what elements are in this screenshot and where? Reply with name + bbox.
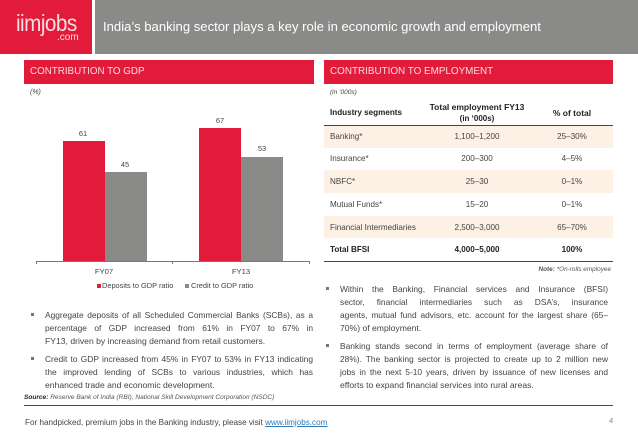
bullet: banking employment: efforts to expand financial services into rural areas. [340, 380, 534, 390]
row: Financial Intermediaries [324, 216, 613, 238]
row: Mutual Funds: 15–20 [466, 200, 488, 209]
row: Banking: 1,100–1,200 [454, 132, 500, 141]
bullet marker [31, 313, 34, 316]
bar: FY07 deposits [63, 141, 105, 261]
panel: contribution to GDP heading [24, 60, 314, 84]
bullet marker [31, 357, 34, 360]
row: Banking [324, 126, 613, 148]
source note: Source: Reserve Bank of India (RBI), National Skill Development Corporation (NSDC) [24, 394, 274, 401]
bullet: banking employment: Banking stands second in terms of employment (average share of [340, 341, 608, 351]
bullet: deposits: Aggregate deposits of all Scheduled Commercial Banks (SCBs), as a [45, 310, 313, 320]
row: Insurance: 200–300 [461, 154, 493, 163]
row: Banking: Banking* [330, 132, 362, 141]
bullet: credit: Credit to GDP increased from 45% in FY07 to 53% in FY13 indicating [45, 354, 313, 364]
bullet: BFSI share: Within the Banking, Financial services and Insurance (BFSI) [340, 284, 608, 294]
row: Banking: 25–30% [557, 132, 587, 141]
footer text: For handpicked, premium jobs in the Banking industry, please visit www.iimjobs.com [25, 418, 327, 427]
right bullets text block [326, 284, 608, 390]
bullet: credit: enhanced trade and economic development. [45, 380, 215, 390]
bullet: BFSI share: sector, financial intermediaries such as DSA’s, insurance [340, 297, 608, 307]
bullet marker [326, 287, 329, 290]
row: Financial Intermediaries: 65–70% [557, 223, 587, 232]
row: Mutual Funds: Mutual Funds* [330, 200, 382, 209]
bullet: deposits [45, 310, 314, 346]
footer rule [24, 405, 613, 406]
table header [330, 102, 591, 122]
row: Insurance [330, 154, 582, 163]
panel: contribution to employment heading: CONTRIBUTION TO EMPLOYMENT [330, 66, 493, 77]
panel: contribution to employment heading [324, 60, 613, 84]
row: NBFC [324, 170, 613, 193]
column header: share: % of total [553, 108, 591, 118]
legend swatch: credit [185, 284, 189, 288]
column header: total employment: Total employment FY13 [430, 102, 524, 112]
row: Financial Intermediaries: 2,500–3,000 [454, 223, 500, 232]
bar: FY13 credit [241, 157, 283, 261]
row: Financial Intermediaries: Financial Intermediaries [330, 223, 416, 232]
legend [97, 281, 253, 290]
left bullets text block [31, 310, 314, 390]
header rule [324, 125, 613, 126]
bullet: banking employment: 28%). The banking sector is projected to create up to 2 million new [340, 354, 608, 364]
legend swatch: deposits [97, 284, 101, 288]
value label 61: 61 [79, 129, 87, 138]
axis label FY13: FY13 [232, 267, 250, 276]
row: Insurance: Insurance* [330, 154, 369, 163]
panel: contribution to GDP heading: CONTRIBUTION TO GDP [30, 66, 144, 77]
row: NBFC: 0–1% [562, 177, 582, 186]
unit label: percent: (%) [30, 89, 41, 96]
row: Mutual Funds: 0–1% [562, 200, 582, 209]
value label 53: 53 [258, 144, 266, 153]
bullet: BFSI share: 70%) of employment. [340, 323, 421, 333]
bullet: deposits: percentage of GDP increased from 61% in FY07 to 67% in [45, 323, 313, 333]
bar: FY07 credit [105, 172, 147, 261]
row: Total BFSI: 4,000–5,000 [454, 245, 500, 254]
table note: Note: *On-rolls employee [539, 266, 611, 273]
bar: FY13 deposits [199, 128, 241, 261]
legend label: deposits: Deposits to GDP ratio [102, 281, 173, 290]
column header: total employment [430, 102, 524, 122]
page number: 4 [609, 416, 613, 425]
bullet: deposits: FY13, driven by increasing demand from retail customers. [45, 336, 265, 346]
column header: segments: Industry segments [330, 108, 402, 117]
bullet: credit: the improved lending of SCBs to various industries, which has [45, 367, 313, 377]
bullet: BFSI share [340, 284, 608, 333]
value label 67: 67 [216, 116, 224, 125]
bullet: BFSI share: agents, mutual fund advisors, etc. account for the largest share (65– [340, 310, 608, 320]
row: Total BFSI: 100% [562, 245, 582, 254]
legend label: credit: Credit to GDP ratio [191, 281, 253, 290]
title bar [95, 0, 638, 54]
bar chart [36, 116, 310, 264]
logo wordmark: iimjobs [16, 10, 77, 36]
unit label: thousands: (in ’000s) [330, 89, 357, 96]
axis label FY07: FY07 [95, 267, 113, 276]
row: Total BFSI: Total BFSI [330, 245, 369, 254]
title: India’s banking sector plays a key role in economic growth and employment [103, 19, 541, 34]
value label 45: 45 [121, 160, 129, 169]
row: Mutual Funds [330, 200, 582, 209]
row: NBFC: 25–30 [466, 177, 488, 186]
employment table [324, 102, 613, 262]
logo block [0, 0, 92, 54]
table bottom rule [324, 261, 613, 262]
bullet: banking employment: jobs in the next 5-10 years, driven by issuance of new licenses and [340, 367, 608, 377]
bullet: credit [45, 354, 313, 390]
row: NBFC: NBFC* [330, 177, 355, 186]
bullet: banking employment [340, 341, 608, 390]
row: Insurance: 4–5% [562, 154, 582, 163]
axis line [36, 261, 310, 262]
column header: total employment: (in ‘000s) [460, 114, 494, 122]
row: Total BFSI [330, 245, 582, 254]
bullet marker [326, 344, 329, 347]
logo suffix: .com [57, 32, 79, 43]
